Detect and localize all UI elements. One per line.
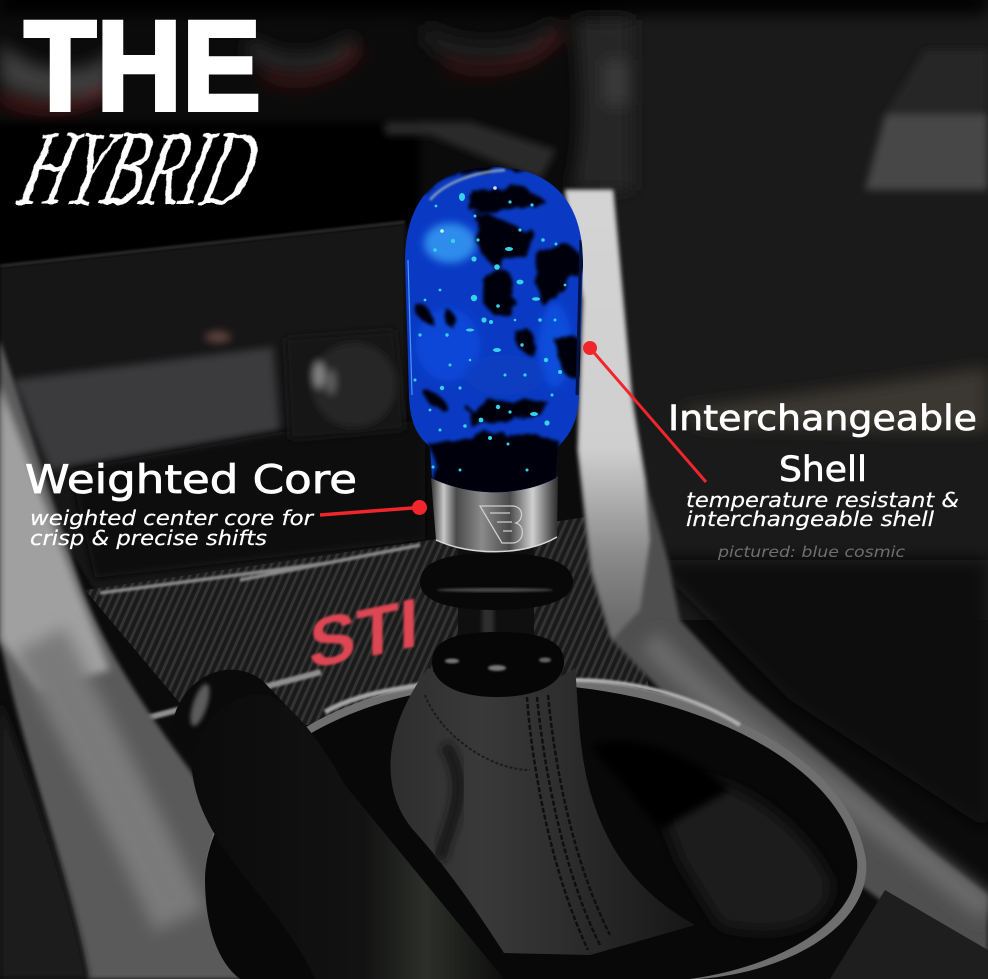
carbon fibre panel xyxy=(85,515,650,745)
shell nebula swirls xyxy=(416,223,571,395)
description: weighted core: crisp & precise shifts xyxy=(30,526,267,550)
hand brake xyxy=(172,670,504,979)
title: HYBRID script: HYBRID xyxy=(8,109,271,227)
pointer: interchangeable shell xyxy=(583,341,706,482)
description: interchangeable shell: interchangeable shell xyxy=(686,507,935,531)
description: weighted core: weighted center core for xyxy=(30,506,315,530)
blue cosmic shift knob shell xyxy=(405,167,583,492)
black shift stem xyxy=(420,545,573,697)
heading: weighted core: Weighted Core xyxy=(25,458,357,503)
title xyxy=(8,0,271,227)
lower right carbon xyxy=(830,890,988,979)
shifter bowl xyxy=(205,676,866,979)
blurred instrument cluster xyxy=(0,42,118,99)
metal collar with logo xyxy=(431,476,558,552)
heading: interchangeable shell: Shell xyxy=(779,450,867,490)
boot stitching xyxy=(527,695,610,950)
right silver trim xyxy=(565,190,988,979)
pointer: weighted core xyxy=(320,500,427,515)
gear shift boot xyxy=(390,668,695,955)
shell dark inclusions xyxy=(412,167,583,492)
STI logo: STI xyxy=(309,582,419,684)
callout: interchangeable shell xyxy=(583,341,977,561)
cigarette lighter xyxy=(205,330,405,440)
cyan speckles xyxy=(414,186,566,471)
icon: brand mark xyxy=(480,506,522,543)
heading: interchangeable shell: Interchangeable xyxy=(668,399,977,439)
console trough panels xyxy=(0,122,420,268)
description: interchangeable shell: temperature resistant & xyxy=(686,488,959,512)
callout: weighted core xyxy=(25,458,427,550)
left silver trim xyxy=(0,340,312,979)
caption: pictured colour: pictured: blue cosmic xyxy=(717,543,906,561)
right side dash panel xyxy=(600,0,988,620)
